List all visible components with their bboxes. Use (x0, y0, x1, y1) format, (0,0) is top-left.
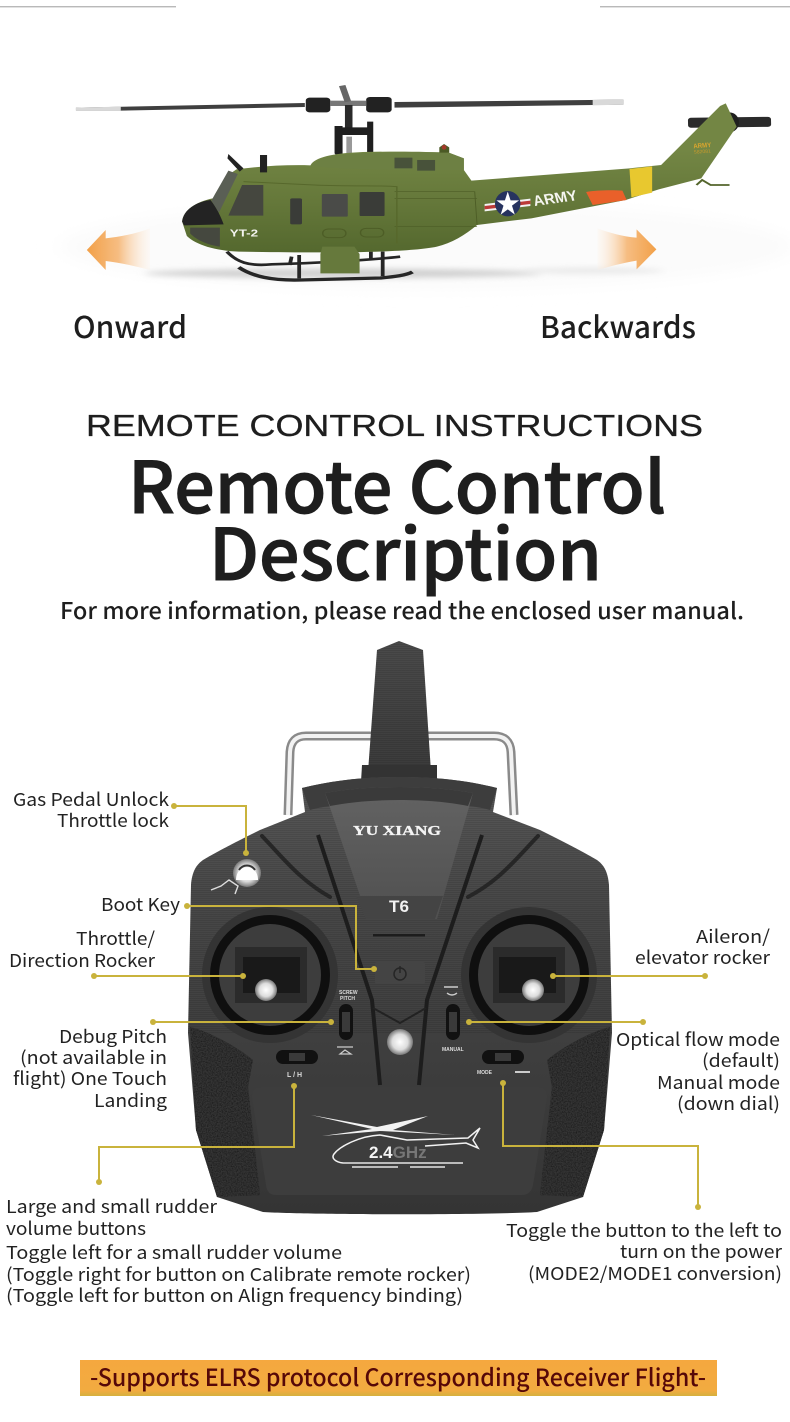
skids (227, 252, 412, 280)
engine cowling detail (243, 144, 477, 243)
callout: debug pitch (13, 1019, 334, 1113)
text (13, 1023, 167, 1113)
screw pitch label: SCREW (339, 990, 358, 996)
banner text: -Supports ELRS protocol Corresponding Receiver Flight- (90, 1358, 706, 1393)
speaker slot (373, 934, 425, 936)
text: Throttle lock (57, 807, 169, 833)
antenna (361, 641, 437, 782)
main rotor (76, 85, 623, 163)
lower panel (252, 1087, 547, 1195)
callout: mode switch (500, 1080, 783, 1286)
fin marking: ARMY (693, 141, 712, 150)
text: Optical flow mode (616, 1026, 780, 1052)
brushed finish (188, 777, 612, 1033)
callout: boot key (101, 891, 377, 972)
tail rotor (688, 112, 771, 132)
step box (320, 247, 360, 273)
L/H label: L / H (287, 1072, 302, 1079)
remote controller (188, 641, 612, 1214)
mode icon (515, 1071, 530, 1073)
text: volume buttons (6, 1215, 146, 1241)
mode label: MODE (477, 1070, 493, 1076)
textured right grip (540, 1027, 610, 1197)
2.4GHz helicopter logo (311, 1115, 480, 1167)
ARMY marking: ARMY (531, 187, 579, 209)
left stick gimbal (202, 907, 338, 1043)
fin marking (693, 141, 712, 155)
callout: throttle rocker (9, 925, 246, 979)
text: elevator rocker (635, 944, 771, 970)
text (635, 923, 771, 970)
centre panel (325, 787, 473, 919)
top cap (302, 777, 497, 810)
title: Remote Control (128, 432, 666, 534)
text (6, 1193, 471, 1308)
callout: throttle lock (13, 786, 249, 856)
callout: rudder volume (6, 1083, 471, 1308)
2.4GHz helicopter logo: 2.4GHz (369, 1143, 427, 1162)
label: Backwards: Backwards (540, 303, 696, 347)
text: Debug Pitch (59, 1023, 167, 1049)
top divider lines (0, 6, 790, 7)
rudder switch (276, 1050, 318, 1064)
YT-2 marking: YT-2 (230, 228, 258, 239)
text (616, 1026, 780, 1116)
callout: optical flow mode (466, 1019, 780, 1116)
lower chevron (373, 1008, 426, 1023)
chin window (190, 228, 220, 247)
orange tail panel (586, 190, 627, 205)
text: (down dial) (677, 1090, 780, 1116)
helicopter product illustration (59, 85, 790, 290)
controller body (188, 777, 612, 1214)
pitch switch (339, 1004, 353, 1040)
model name: T6 (389, 897, 409, 916)
subtitle: For more information, please read the enclosed user manual. (60, 592, 744, 626)
power button (375, 962, 425, 984)
title: Description (209, 499, 602, 601)
screw pitch label: PITCH (340, 996, 355, 1002)
roundel (485, 191, 530, 216)
manual label: MANUAL (442, 1047, 464, 1053)
carry handle (288, 736, 514, 815)
text: turn on the power (620, 1238, 783, 1264)
fuselage (182, 103, 737, 252)
door details (323, 228, 384, 238)
nose (182, 200, 224, 225)
windshield and windows (211, 171, 385, 224)
text: Throttle/ (76, 925, 155, 951)
pitch mode icon (337, 1047, 353, 1054)
text: Aileron/ (696, 923, 770, 949)
throttle lock knob (233, 859, 261, 887)
text: Toggle left for a small rudder volume (6, 1239, 342, 1265)
text (9, 925, 156, 973)
text: Toggle the button to the left to (506, 1217, 782, 1243)
centre knob (387, 1029, 413, 1055)
screw pitch label (339, 990, 358, 1002)
section eyebrow heading: REMOTE CONTROL INSTRUCTIONS (86, 408, 703, 443)
arrow: backwards (597, 228, 656, 270)
antennas (227, 154, 267, 172)
handle highlight (288, 736, 514, 815)
arrow: onward (87, 228, 150, 270)
text: (MODE2/MODE1 conversion) (528, 1260, 782, 1286)
text: (Toggle left for button on Align frequency binding) (6, 1282, 463, 1308)
flow mode icon (444, 987, 458, 995)
text: Boot Key (101, 891, 181, 917)
floor shadow (59, 203, 790, 290)
protocol banner (80, 1358, 717, 1396)
yellow tail band (629, 166, 652, 197)
brand name: YU XIANG (353, 824, 441, 839)
label: Onward: Onward (73, 303, 187, 347)
text (506, 1217, 783, 1286)
shoulder contour lines (262, 836, 538, 897)
text (13, 786, 169, 833)
T6 plate (356, 896, 443, 919)
flow switch (446, 1004, 460, 1040)
text: (Toggle right for button on Calibrate remote rocker) (6, 1261, 471, 1287)
throttle lock icon (211, 880, 238, 894)
tail skid (697, 180, 730, 185)
textured left grip (190, 1027, 260, 1197)
text: Large and small rudder (6, 1193, 218, 1219)
text: Manual mode (657, 1069, 780, 1095)
dark chevron lines (318, 835, 482, 1085)
mode switch (482, 1050, 524, 1064)
text: Direction Rocker (9, 947, 156, 973)
text: (default) (702, 1047, 780, 1073)
title (128, 432, 666, 601)
text: Landing (94, 1087, 167, 1113)
text: flight) One Touch (13, 1065, 167, 1091)
fin marking: 582081 (694, 149, 711, 155)
right stick gimbal (461, 907, 597, 1043)
text: Gas Pedal Unlock (13, 786, 169, 812)
text: (not available in (20, 1044, 167, 1070)
callout: aileron rocker (550, 923, 771, 979)
centre panel dark band (325, 787, 473, 806)
